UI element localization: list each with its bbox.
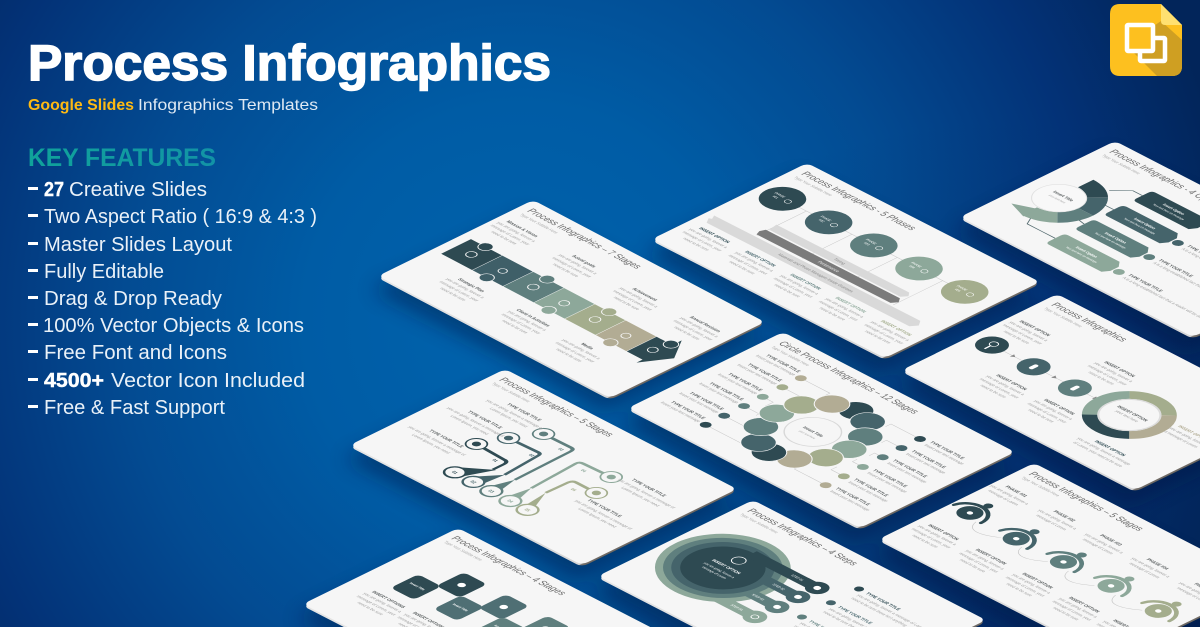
right captions: Insert your text message [847, 481, 890, 503]
stage captions: Lorem Ipsum, you need [620, 486, 662, 507]
slide title: Process Infographics – 4 Steps [745, 507, 862, 567]
phase circles: #01 [771, 195, 780, 199]
right captions: TYPE YOUR TITLE [834, 487, 872, 506]
right captions: Insert your text message [923, 443, 966, 466]
option tags: Insert Option [1132, 217, 1158, 230]
stage captions [401, 217, 727, 385]
concentric circles and bars: INSERT OPTION [710, 558, 742, 575]
step captions: you are going, forever a message [1076, 437, 1133, 466]
slide title: Circle Process Infographics – 12 Stages [776, 340, 923, 415]
step captions: need to be sure [1027, 408, 1056, 423]
slide subtitle: Type Your Subtitle Here [443, 540, 484, 562]
slide subtitle: Type Your Subtitle Here [490, 382, 532, 403]
phase captions: you are going, forever a [733, 251, 776, 272]
hook number labels: 04 [579, 469, 588, 473]
panel: process infographics ring slide [900, 294, 1200, 492]
phase captions: need to be sure [728, 260, 757, 275]
phase captions: need to be sure [682, 237, 711, 252]
left captions: TYPE YOUR TITLE [688, 391, 725, 411]
ring diagram: INSERT OPTION [1116, 405, 1149, 422]
checker tiles: Insert Title [408, 582, 426, 591]
icon: google slides logo [1110, 4, 1182, 76]
phase circles [749, 182, 998, 309]
stage captions: Lorem Ipsum, you need [449, 414, 491, 436]
stage captions: TYPE YOUR TITLE [466, 410, 504, 429]
phase captions top: message of Lorem [1128, 562, 1162, 579]
step captions: you are going, forever a [1008, 321, 1050, 342]
phase captions: INSERT OPTION [789, 273, 822, 290]
stage captions [401, 389, 695, 539]
slide subtitle: Type Your Subtitle Here [1042, 307, 1084, 328]
phase captions: message of Lorem, your [727, 254, 770, 276]
curve connectors [965, 522, 1145, 614]
phase captions: INSERT OPTION [879, 319, 913, 337]
phase captions: INSERT OPTION [834, 296, 868, 313]
ring diagram: your text here [1048, 194, 1067, 204]
phase captions: INSERT OPTION [743, 250, 777, 267]
step captions: INSERT OPTION [1103, 361, 1136, 378]
phase circles: #03 [862, 242, 871, 246]
phase circles: PHASE [819, 215, 833, 222]
step circles [968, 333, 1099, 400]
phase captions: message of Lorem, your [681, 230, 724, 252]
centre circle: your text here [797, 430, 817, 440]
step captions: message of Lorem, your [1086, 364, 1129, 386]
right captions: Insert your text message [866, 471, 909, 494]
phase captions: message of Lorem, your [772, 277, 815, 299]
key features heading: KEY FEATURES [28, 144, 216, 172]
option tags: Your text here on message [1151, 203, 1186, 221]
phase captions: you are going, forever a [779, 274, 821, 296]
phase captions top: PHASE #02 [1052, 510, 1077, 523]
right text list: TYPE YOUR TITLE [1127, 273, 1164, 293]
stage captions: Client in Activities [515, 308, 552, 328]
stage captions: you are going, forever a [496, 221, 538, 243]
phase circles: #04 [908, 265, 916, 269]
stage captions: message of Lorem, your [554, 341, 597, 363]
phase captions: you are going, forever a [688, 228, 730, 249]
phase bands: Materials and Phase Managers Inside Grantees [777, 253, 855, 293]
stage captions: you are going, forever a message of [407, 425, 468, 457]
key features list: 27 [44, 179, 64, 201]
key features list: Free Font and Icons [44, 342, 227, 364]
phase captions: need to be sure [863, 330, 893, 345]
centre circle [772, 411, 853, 452]
left captions: Insert your text message [659, 401, 703, 423]
key features list: 4500+ [44, 370, 104, 392]
stage captions: TYPE YOUR TITLE [428, 429, 465, 448]
phase circles: PHASE [864, 238, 878, 245]
subtitle: Google Slides [28, 97, 134, 114]
hook paths [433, 422, 628, 521]
stage captions: Annual Revision [688, 315, 722, 333]
panel: process infographics 5 stages hooks slide [348, 369, 739, 567]
concentric circles and bars: STEP 01 [790, 574, 805, 582]
concentric circles and bars: STEP 03 [750, 593, 765, 601]
stage captions: Lorem Ipsum, you need [577, 507, 619, 529]
left captions: TYPE YOUR TITLE [727, 373, 764, 392]
left captions: Insert your text message [698, 382, 741, 404]
tile captions [349, 589, 451, 627]
hook number labels: 01 [491, 458, 500, 463]
insert option captions bottom: INSERT OPTION [974, 548, 1008, 565]
option tags: Insert Option [1161, 203, 1187, 216]
stage captions: you are going, forever a [679, 316, 720, 338]
right captions [829, 441, 972, 512]
left captions: TYPE YOUR TITLE [669, 401, 707, 420]
stage captions: you are going, forever a [557, 253, 599, 275]
phase captions: message of Lorem, your [817, 300, 860, 322]
left captions: Insert your text message [754, 354, 798, 376]
panel: process infographics 4 steps slide [596, 500, 988, 627]
phase captions: INSERT OPTION [698, 227, 731, 244]
phase captions top: PHASE #01 [1004, 485, 1029, 498]
stage captions: Actual goals [571, 254, 598, 268]
stage captions: need to be sure [490, 230, 519, 246]
step captions: INSERT OPTION [1093, 440, 1127, 457]
option tags: Your text here on message [1093, 232, 1128, 249]
tile captions: you are going, forever a [362, 592, 404, 613]
stage captions: Media [580, 342, 595, 350]
key features list: Creative Slides [69, 179, 207, 201]
right captions: Insert your text message [829, 490, 872, 512]
phase circles: #02 [817, 219, 826, 223]
hook number labels [491, 436, 612, 498]
stage captions: need to be sure [555, 348, 584, 363]
phase captions top: you are going, forever a [1083, 533, 1125, 554]
slide subtitle: Type Your Subtitle Here [1020, 476, 1062, 497]
hook number labels: 03 [557, 447, 566, 452]
phase circles: PHASE [910, 261, 923, 268]
concentric circles and bars: you are going, forever a [702, 562, 736, 579]
panel: process infographics 7 stages slide [376, 200, 767, 400]
insert option captions bottom: message of Lorem, your [910, 527, 953, 549]
right captions: TYPE YOUR TITLE [910, 450, 948, 469]
left captions: Insert your text message [716, 373, 760, 395]
step captions: a message of Lorem [1163, 430, 1200, 449]
stage captions: TYPE YOUR TITLE [630, 478, 668, 497]
stage captions: message of Lorem, your [612, 289, 654, 312]
left captions: TYPE YOUR TITLE [708, 382, 745, 401]
step list: TYPE YOUR TITLE [836, 606, 874, 625]
stage captions: TYPE YOUR TITLE [586, 499, 623, 518]
stage captions: need to be sure [612, 296, 642, 311]
ring diagram: Insert Title [1052, 190, 1075, 202]
right text list: TYPE YOUR TITLE [1157, 259, 1195, 278]
phase captions top: message of Lorem [1035, 514, 1069, 531]
option tags: Insert Option [1103, 231, 1129, 244]
insert option captions bottom: you are going, forever a [917, 525, 959, 546]
stage captions: need to be sure [501, 319, 530, 334]
left captions: TYPE YOUR TITLE [746, 363, 784, 382]
stage captions: message of Lorem, your [551, 256, 593, 278]
stage captions: Lorem Ipsum, you need [488, 407, 530, 428]
connector lines [1023, 179, 1142, 238]
panel: process infographics 4 stages tiles slide [301, 528, 693, 627]
step list: need to be sure there isn't anything [850, 597, 909, 627]
insert option captions bottom: you are going, forever a [964, 549, 1006, 571]
right text list [1109, 224, 1200, 328]
right captions: TYPE YOUR TITLE [929, 441, 966, 460]
tile captions: message of Lorem, your [355, 595, 398, 617]
step captions: message of Lorem, your [978, 377, 1021, 399]
step captions [921, 316, 1200, 478]
tile captions: need to be sure [356, 601, 385, 616]
panel: process infographics 4 options slide [958, 141, 1200, 340]
phase captions [675, 224, 918, 348]
slide title: Process Infographics – 4 Stages [449, 534, 570, 597]
phase captions: you are going, forever a [824, 297, 866, 319]
slide title: Process Infographics [1049, 301, 1131, 343]
stage captions: need to be sure [551, 263, 581, 278]
hook numbered start circles: 05 [523, 508, 532, 512]
left captions [659, 351, 803, 423]
stage captions: need to be sure [673, 326, 702, 341]
phase captions: message of Lorem, your [863, 323, 906, 345]
option tags: Your text here on message [1064, 246, 1099, 264]
step list: TYPE YOUR TITLE [864, 592, 902, 611]
right captions: Insert your text message [886, 462, 929, 484]
step captions: need to be sure [1087, 371, 1116, 386]
slide title: Process Infographics – 5 Stages [497, 376, 618, 438]
stage captions: you are going, forever a [445, 277, 486, 299]
phase captions top: message of Lorem [987, 489, 1021, 506]
step captions: message of Lorem, your [1026, 402, 1069, 424]
insert option captions bottom: INSERT OPTION [927, 524, 960, 541]
stage captions: you are going, forever a [561, 338, 602, 360]
hook numbered start circles: 03 [487, 489, 496, 494]
phase captions: need to be sure [818, 306, 848, 321]
ring of twelve stages [709, 379, 916, 484]
slide subtitle: Type Your Subtitle Here [738, 513, 780, 534]
insert option captions bottom: INSERT OPTION [1021, 572, 1054, 589]
panel: process infographics 5 phases slide [650, 163, 1042, 360]
hook numbered start circles: 04 [506, 499, 515, 504]
stage captions: need to be sure [439, 287, 468, 302]
checker tiles [391, 562, 613, 627]
step captions: you are going, forever a [985, 375, 1027, 396]
slide title: Process Infographics - 5 Phases [799, 170, 920, 232]
key features list: Vector Icon Included [111, 370, 305, 392]
step captions: you are going, forever a [1093, 361, 1135, 383]
insert option captions bottom: message of Lorem, your [1004, 576, 1047, 598]
panel: circle process infographics 12 stages slide [626, 332, 1017, 530]
ring diagram [1003, 174, 1114, 230]
concentric circles and bars: STEP 02 [771, 583, 786, 591]
right dots [817, 435, 928, 489]
key features list: Fully Editable [44, 261, 164, 283]
insert option captions bottom: need to be sure [1051, 606, 1081, 621]
phase circles: #05 [953, 288, 962, 292]
stage chain [435, 235, 696, 370]
step captions: INSERT OPTION [1043, 398, 1076, 416]
hook numbered start circles: 02 [469, 480, 478, 484]
stage captions: message of Lorem, your [500, 313, 543, 335]
insert option captions bottom: you are going, forever a [1011, 573, 1053, 595]
step list [755, 585, 945, 627]
left captions: Insert your text message [736, 363, 779, 386]
centre circle: Insert Title [801, 426, 825, 438]
stage captions: message of Lorem, your [672, 319, 715, 341]
subtitle: Infographics Templates [138, 97, 318, 114]
key features list: 100% Vector Objects & Icons [43, 315, 304, 337]
step captions: INSERT OPTION [995, 374, 1028, 391]
step captions: need to be sure [979, 384, 1008, 399]
step captions: you are going, forever a [1033, 399, 1075, 421]
key features list: Drag & Drop Ready [44, 288, 222, 310]
stage captions: you are going, forever a message of [573, 499, 634, 531]
stage captions: you are going, forever a [506, 310, 548, 332]
main title: Process Infographics [28, 35, 551, 91]
step captions: of Lorem, your need to be sure [1072, 441, 1125, 468]
left dots [697, 374, 809, 429]
key features list: Master Slides Layout [44, 234, 232, 256]
option tags: Insert Option [1074, 246, 1100, 259]
phase bands: Timing [832, 257, 848, 265]
key features list [28, 179, 317, 419]
hook top icon circles [461, 414, 643, 507]
stage captions: message of Lorem, your [438, 280, 481, 302]
insert option captions bottom [904, 521, 1150, 627]
hook number labels: 02 [527, 453, 537, 458]
phase captions: you are going, forever a [869, 320, 911, 342]
phase captions top: PHASE #03 [1099, 534, 1124, 547]
phase captions top: message of Lorem [1081, 538, 1115, 555]
checker tiles: Insert Title [451, 603, 469, 612]
connector lines [706, 378, 920, 486]
subtitle [28, 97, 318, 114]
slide subtitle: Type Your Subtitle Here [518, 213, 560, 235]
insert option captions bottom: need to be sure [911, 534, 940, 549]
slide title: Process Infographics – 7 Stages [525, 207, 646, 270]
right captions: Insert your text message [905, 452, 948, 475]
panel: process infographics 5 stages curve slide [877, 463, 1200, 627]
insert option captions bottom: need to be sure [1005, 582, 1034, 597]
insert option captions bottom: INSERT OPTION [1067, 596, 1101, 613]
insert option captions bottom: message of Lorem, your [958, 552, 1001, 574]
phase captions top: you are going, forever a [989, 484, 1031, 506]
phase bands: Performance [816, 260, 842, 273]
phase captions top: you are going, forever a [1037, 509, 1079, 530]
hook number labels: 05 [569, 487, 578, 492]
stage captions: Lorem Ipsum, you need [410, 433, 452, 455]
step captions: need to be sure [1002, 330, 1032, 345]
slide subtitle: Type Your Subtitle Here [770, 345, 812, 367]
right captions: TYPE YOUR TITLE [871, 469, 909, 488]
ring diagram: your text here [1114, 410, 1141, 423]
stage captions: Strategic Plan [457, 278, 486, 293]
stage captions: you are going, forever a [618, 287, 660, 308]
insert option captions bottom: you are going, forever a [1057, 597, 1099, 619]
hook numbered start circles: 01 [450, 470, 460, 475]
left captions: Insert your text message [678, 392, 721, 414]
step captions: message of Lorem, your [1002, 323, 1044, 345]
left captions: TYPE YOUR TITLE [765, 354, 802, 373]
phase bands [703, 204, 947, 328]
stage captions: Achievement [631, 287, 659, 302]
right captions: TYPE YOUR TITLE [891, 459, 929, 478]
phase captions: need to be sure [773, 283, 802, 298]
ring diagram [1073, 387, 1186, 443]
tile captions: INSERT OPTIONS [371, 590, 407, 609]
stage captions: Mission & Vision [505, 220, 540, 238]
stage captions: you are going, forever a message of [616, 478, 677, 509]
option tags [1045, 191, 1200, 274]
slide subtitle: Type Your Subtitle Here [792, 176, 834, 197]
insert option captions bottom: need to be sure [958, 558, 988, 573]
slide subtitle: Type Your Subtitle Here [1100, 154, 1142, 175]
connector lines [733, 199, 965, 316]
concentric circles and bars [627, 520, 846, 627]
phase circles: PHASE [773, 192, 787, 199]
stage captions: you are going, forever a message of [485, 399, 546, 430]
slide title: Process Infographics – 5 Stages [1026, 470, 1147, 532]
key features list: Two Aspect Ratio ( 16:9 & 4:3 ) [44, 206, 317, 228]
phase captions top: PHASE #04 [1145, 558, 1170, 571]
connector with arrows [990, 344, 1101, 401]
right captions: TYPE YOUR TITLE [852, 478, 890, 497]
concentric circles and bars: message of Lorem [701, 566, 728, 580]
stage captions: TYPE YOUR TITLE [505, 403, 543, 422]
hook numbered start circles [440, 465, 543, 518]
phase captions top: you are going, forever a [1130, 557, 1172, 578]
phase captions top [983, 481, 1200, 606]
stage captions: you are going, forever a message of [446, 406, 507, 438]
step captions: INSERT OPTION [1018, 320, 1052, 337]
phase circles: PHASE [955, 285, 969, 292]
stage nodes with arcs [943, 495, 1195, 624]
option tags: Your text here on message [1122, 217, 1157, 235]
concentric circles and bars: STEP 04 [729, 604, 744, 611]
key features list: Free & Fast Support [44, 397, 225, 419]
stage captions: message of Lorem, your [489, 224, 532, 246]
insert option captions bottom: message of Lorem, your [1051, 600, 1094, 622]
